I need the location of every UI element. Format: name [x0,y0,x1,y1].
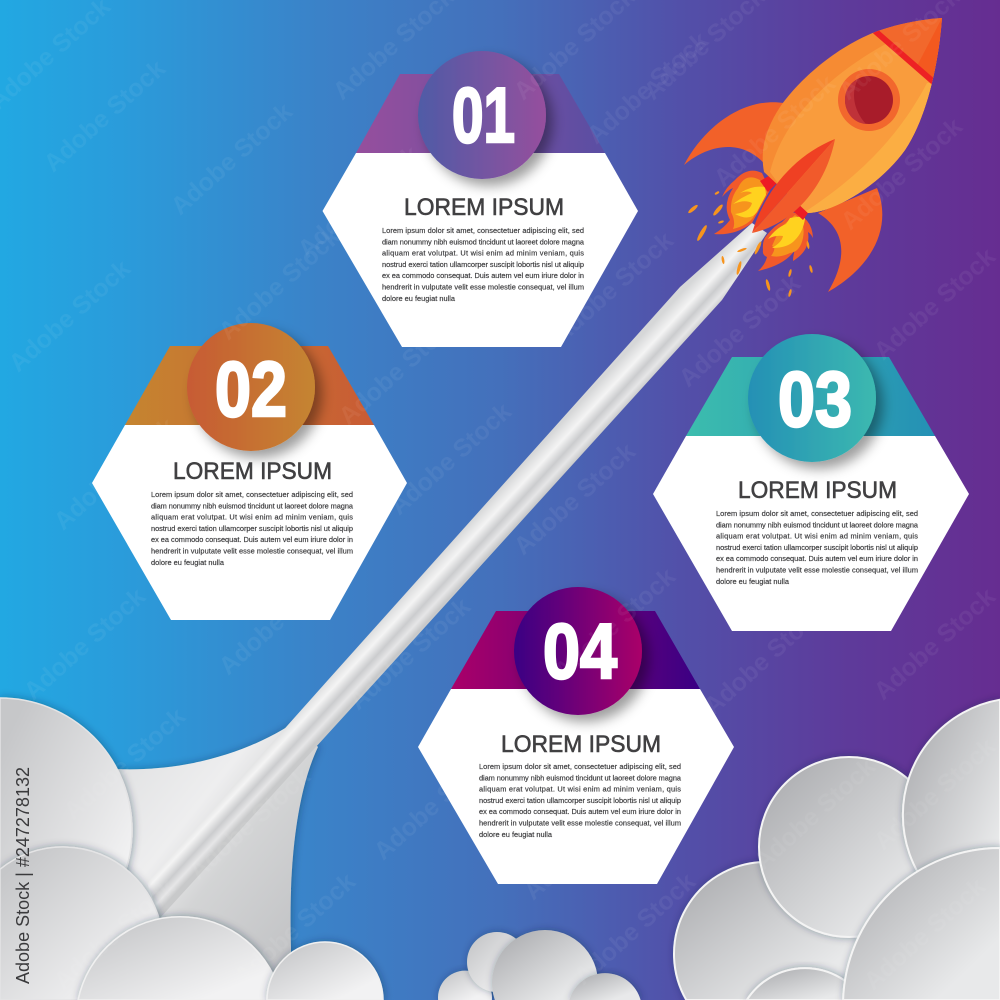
body text 04: hendrerit in vulputate velit esse molestie consequat, vel illum [479,818,681,828]
body text 04 [479,762,682,839]
hexagon 03 [653,436,969,631]
body text 01: Lorem ipsum dolor sit amet, consectetuer adipiscing elit, sed [382,226,584,235]
paper trail: rocket exhaust tube [147,223,767,918]
body text 01: ex ea commodo consequat. Duis autem vel eum iriure dolor in [382,271,584,280]
rocket body [762,18,942,213]
ribbon 03 [686,357,935,436]
watermark: Adobe Stock [229,867,361,991]
watermark: Adobe Stock [166,97,298,221]
number 04: 04 [543,607,617,695]
body text 01 [382,226,585,303]
watermark: Adobe Stock [674,269,806,393]
sparks [687,191,813,297]
paper trail: flared sheet [100,722,318,990]
rocket centre fin [752,139,835,233]
heading 03: LOREM IPSUM [738,477,897,504]
body text 02: diam nonummy nibh euismod tincidunt ut laoreet dolore magna [151,501,354,510]
hexagon 04 [418,689,734,884]
watermark: Adobe Stock [509,437,641,561]
watermark: Adobe Stock [369,742,501,866]
ribbon 01 [356,74,605,153]
watermark: Adobe Stock [49,412,181,536]
body text 03: diam nonummy nibh euismod tincidunt ut laoreet dolore magna [716,520,919,529]
clouds: bottom left [0,698,383,1000]
badge 02 [187,323,315,451]
heading 04: LOREM IPSUM [501,731,661,758]
body text 01: hendrerit in vulputate velit esse molestie consequat, vel illum [382,282,584,292]
rocket left fin [684,102,784,168]
watermark: Adobe Stock [709,69,841,193]
watermark: Adobe Stock [749,752,881,876]
body text 02 [151,490,354,567]
body text 01: dolore eu feugiat nulla [382,294,456,303]
body text 03: nostrud exerci tation ullamcorper suscipit lobortis nisl ut aliquip [716,543,918,552]
number 01: 01 [452,71,515,159]
rocket right fin [818,188,882,292]
panel: step 03 [653,334,969,631]
panel: step 01 [322,51,638,347]
watermark: Adobe Stock [4,254,136,378]
body text 03: Lorem ipsum dolor sit amet, consectetuer adipiscing elit, sed [716,509,918,518]
watermark: Adobe Stock [334,307,466,431]
body text 04: dolore eu feugiat nulla [479,830,553,839]
watermark: Adobe Stock [293,140,425,264]
body text 01: nostrud exerci tation ullamcorper suscipit lobortis nisl ut aliquip [382,260,584,269]
watermark: Adobe Stock [869,732,1000,856]
watermark: Adobe Stock [49,872,181,996]
rocket flame left [714,171,770,234]
watermark: Adobe Stock [184,762,316,886]
panel: step 04 [418,587,734,884]
badge 01 [418,51,546,179]
body text 03: hendrerit in vulputate velit esse molestie consequat, vel illum [716,566,918,574]
watermark: Adobe Stock [344,592,476,716]
body text 04: ex ea commodo consequat. Duis autem vel eum iriure dolor in [479,807,681,816]
body text 02: nostrud exerci tation ullamcorper suscipit lobortis nisl ut aliquip [151,524,353,533]
body text 02: Lorem ipsum dolor sit amet, consectetuer adipiscing elit, sed [151,490,353,499]
watermark: Adobe Stock [582,26,714,150]
body text 02: ex ea commodo consequat. Duis autem vel eum iriure dolor in [151,535,353,544]
body text 03: dolore eu feugiat nulla [716,577,790,586]
watermark: Adobe Stock [836,112,968,236]
watermark: Adobe Stock [869,582,1000,706]
hexagon 02 [92,425,407,620]
heading 01: LOREM IPSUM [404,194,564,221]
number 03: 03 [778,355,852,443]
body text 03 [716,509,919,586]
badge 04 [514,587,642,715]
body text 03: ex ea commodo consequat. Duis autem vel eum iriure dolor in [716,554,918,563]
clouds: bottom centre [438,930,641,1000]
watermark: Adobe Stock [19,582,151,706]
body text 01: diam nonummy nibh euismod tincidunt ut laoreet dolore magna [382,237,585,246]
watermark: Adobe Stock [547,226,679,350]
number 02: 02 [215,345,287,433]
watermark: Adobe Stock [569,867,701,991]
rocket nozzles [760,174,808,220]
badge 03 [748,334,876,462]
body text 04: nostrud exerci tation ullamcorper suscipit lobortis nisl ut aliquip [479,796,681,805]
watermark: Adobe Stock [385,397,517,521]
watermark: Adobe Stock [859,872,991,996]
watermark: Adobe Stock [549,562,681,686]
stock id caption: Adobe Stock | #247278132 [13,767,33,984]
clouds: bottom right [674,700,1000,1000]
body text 02: aliquam erat volutpat. Ut wisi enim ad minim veniam, quis [151,513,353,522]
body text 04: aliquam erat volutpat. Ut wisi enim ad minim veniam, quis [479,785,681,794]
body text 03: aliquam erat volutpat. Ut wisi enim ad minim veniam, quis [716,532,918,541]
watermark: Adobe Stock [519,782,651,906]
heading 02: LOREM IPSUM [173,458,332,485]
body text 04: diam nonummy nibh euismod tincidunt ut laoreet dolore magna [479,773,682,782]
body text 04: Lorem ipsum dolor sit amet, consectetuer adipiscing elit, sed [479,762,681,771]
body text 02: hendrerit in vulputate velit esse molestie consequat, vel illum [151,546,353,556]
icon: rocket [684,18,942,297]
rocket window [838,69,900,131]
body text 02: dolore eu feugiat nulla [151,558,225,567]
panel: step 02 [92,323,407,620]
watermark: Adobe Stock [39,54,171,178]
watermark: Adobe Stock [869,242,1000,366]
watermark: Adobe Stock [214,222,346,346]
watermark: Adobe Stock [214,557,346,681]
watermark: Adobe Stock [699,597,831,721]
hexagon 01 [322,153,638,347]
ribbon 04 [451,611,700,689]
watermark: Adobe Stock [59,702,191,826]
rocket flame right [758,212,813,271]
body text 01: aliquam erat volutpat. Ut wisi enim ad minim veniam, quis [382,249,584,258]
ribbon 02 [125,346,374,425]
